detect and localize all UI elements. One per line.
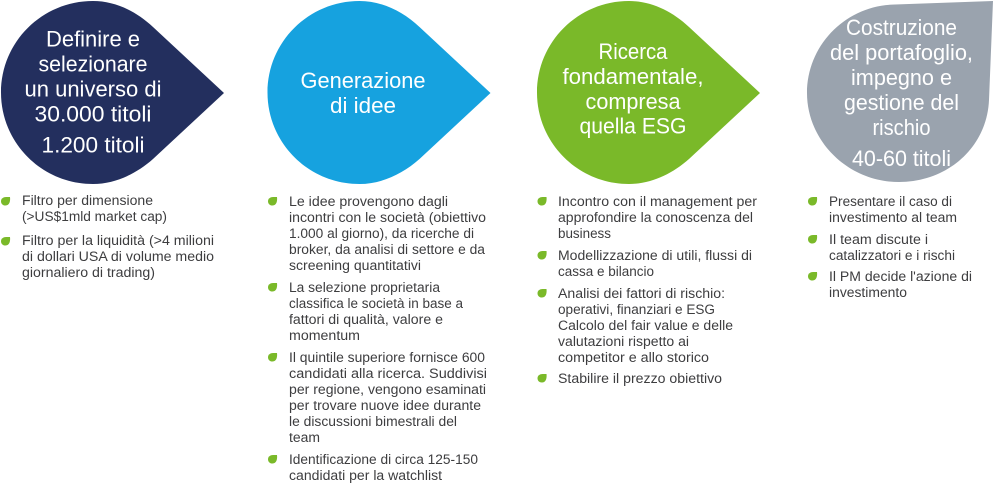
bullet: modelling: cassa e bilancio (558, 264, 654, 279)
bullet: liquidity filter: giornaliero di trading) (22, 265, 155, 280)
panel: step 1 heading drop (1, 1, 224, 184)
bullet: top quintile: candidati alla ricerca. Suddivisi (289, 366, 487, 381)
panel: step 1 heading drop: 1.200 titoli (42, 132, 144, 158)
bullet: idea sources: 1.000 al giorno), da ricerche di (289, 226, 474, 241)
panel: step 2 heading drop: di idee (330, 93, 396, 118)
panel: step 1 heading drop: un universo di (24, 76, 162, 102)
bullet: present case: investimento al team (829, 210, 957, 225)
bullet: top quintile: per regione, vengono esaminati (289, 382, 486, 397)
bullet: top quintile: team (289, 430, 320, 445)
bullet: risk factors: Calcolo del fair value e delle (558, 318, 733, 333)
bullet: proprietary selection: momentum (289, 328, 360, 343)
bullet: PM decision: investimento (829, 285, 907, 300)
panel: step 2 heading drop: Generazione (300, 68, 426, 93)
bullet: top quintile: le discussioni bimestrali del (289, 414, 457, 429)
panel: step 3 heading drop: compresa (586, 89, 681, 114)
panel: step 4 heading drop: impegno e (851, 65, 952, 90)
bullet: idea sources: broker, da analisi di settore e da (289, 242, 485, 257)
bullet: idea sources: screening quantitativi (289, 258, 421, 273)
panel: step 4 heading drop: rischio (872, 115, 930, 140)
panel: step 1 heading drop: Definire e (46, 26, 140, 52)
bullet: top quintile: per trovare nuove idee durante (289, 398, 481, 413)
bullet: liquidity filter: Filtro per la liquidità (>4 milioni (22, 233, 214, 248)
bullet: modelling: Modellizzazione di utili, flussi di (558, 248, 752, 263)
panel: step 4 heading drop: 40-60 titoli (852, 146, 951, 171)
bullet: proprietary selection: fattori di qualità, valore e (289, 312, 443, 327)
panel: step 3 heading drop: quella ESG (580, 114, 686, 138)
bullet: management meeting: approfondire la conoscenza del (558, 210, 753, 225)
panel: step 4 heading drop: gestione del (844, 90, 959, 115)
bullet: team discussion (808, 232, 955, 263)
bullet: modelling (538, 248, 752, 279)
bullet: top quintile (268, 350, 487, 445)
panel: step 4 bullet list (808, 194, 972, 300)
bullet: target price: Stabilire il prezzo obiettivo (558, 371, 722, 386)
panel: step 4 heading drop: del portafoglio, (830, 40, 973, 65)
bullet: risk factors: competitor e allo storico (558, 350, 709, 365)
bullet: management meeting (538, 194, 758, 241)
bullet: proprietary selection: La selezione proprietaria (289, 280, 440, 295)
bullet: watchlist (268, 452, 478, 483)
panel: step 3 heading drop: fondamentale, (562, 64, 704, 89)
bullet: proprietary selection (268, 280, 463, 343)
bullet: management meeting: Incontro con il management per (558, 194, 758, 209)
bullet: team discussion: catalizzatori e i rischi (829, 248, 955, 263)
bullet: proprietary selection: classifica le società in base a (289, 296, 463, 311)
bullet: watchlist: candidati per la watchlist (289, 468, 442, 483)
bullet: risk factors: operativi, finanziari e ESG (558, 302, 715, 317)
panel: step 4 heading drop: Costruzione (846, 15, 957, 40)
bullet: liquidity filter (1, 233, 214, 280)
bullet: liquidity filter: di dollari USA di volume medio (22, 249, 214, 264)
bullet: size filter (1, 193, 167, 224)
bullet: PM decision (808, 269, 972, 300)
bullet: risk factors (538, 286, 733, 365)
panel: step 1 heading drop: selezionare (38, 52, 148, 76)
bullet: risk factors: Analisi dei fattori di rischio: (558, 286, 725, 301)
bullet: management meeting: business (558, 226, 611, 241)
bullet: idea sources (268, 194, 486, 273)
bullet: team discussion: Il team discute i (829, 232, 928, 247)
bullet: top quintile: Il quintile superiore fornisce 600 (289, 350, 485, 365)
panel: step 3 bullet list (538, 194, 758, 386)
bullet: PM decision: Il PM decide l'azione di (829, 269, 972, 284)
bullet: watchlist: Identificazione di circa 125-150 (289, 452, 478, 467)
panel: step 3 heading drop: Ricerca (598, 39, 668, 64)
bullet: present case (808, 194, 957, 225)
panel: step 1 bullet list (1, 193, 214, 280)
bullet: present case: Presentare il caso di (829, 194, 952, 209)
panel: step 2 heading drop (268, 1, 490, 184)
bullet: size filter: (>US$1mld market cap) (22, 209, 167, 224)
panel: step 2 bullet list (268, 194, 487, 483)
bullet: idea sources: incontri con le società (obiettivo (289, 210, 486, 225)
panel: step 4 heading drop (807, 1, 993, 182)
bullet: idea sources: Le idee provengono dagli (289, 194, 448, 209)
bullet: size filter: Filtro per dimensione (22, 193, 153, 208)
panel: step 1 heading drop: 30.000 titoli (34, 102, 152, 126)
bullet: risk factors: valutazioni rispetto ai (558, 334, 689, 349)
panel: step 3 heading drop (537, 1, 760, 184)
